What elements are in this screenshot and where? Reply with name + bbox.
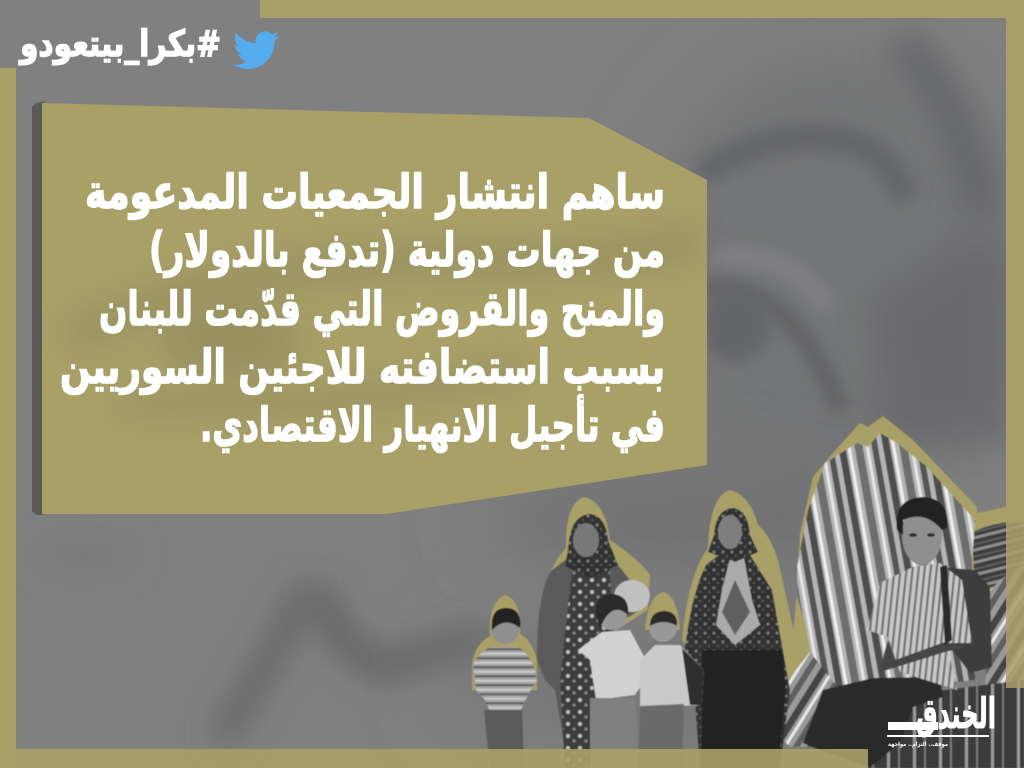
background: nose crease [220, 586, 310, 740]
statement text: ساهم انتشار الجمعيات المدعومة [85, 165, 665, 220]
bag: second bundle at right [972, 522, 1024, 590]
logo: Al-Khandaq [887, 689, 996, 748]
panel: main statement [32, 101, 707, 515]
gold halos behind figures [472, 416, 1024, 690]
statement text: في تأجيل الانهيار الاقتصادي. [200, 394, 665, 453]
bag: base stripes [868, 680, 1024, 768]
background: eye fold light [708, 256, 830, 310]
bag: large striped bundle [797, 433, 975, 690]
panel body [42, 103, 707, 514]
statement text: والمنح والقروض التي قدّمت للبنان [99, 282, 665, 337]
gold frame: bottom strip [0, 749, 868, 768]
background: eye lid dark [700, 288, 840, 410]
gold overlay on right strip [1006, 505, 1024, 688]
logo underline [887, 735, 989, 737]
figure: boy sitting on bag [803, 497, 992, 767]
background: cheek side shadow [870, 240, 1010, 440]
statement text: من جهات دولية (تدفع بالدولار) [149, 223, 665, 278]
gold frame: left strip [0, 68, 16, 768]
logo stroke bar [888, 722, 938, 730]
background: nose wing [320, 590, 490, 668]
figure: woman left [537, 514, 650, 768]
background: brow arc [700, 137, 905, 200]
statement text [60, 165, 665, 453]
gold frame: top strip [260, 0, 1024, 18]
panel side edge [32, 101, 46, 515]
hashtag heading with icon [18, 24, 279, 69]
panel: eye showing through [70, 240, 700, 406]
logo tagline: موقف.. التزام.. مواجهة [888, 741, 948, 748]
figure: child right [638, 611, 704, 768]
figure: child left [473, 608, 537, 768]
statement text: بسبب استضافته للاجئين السوريين [60, 340, 665, 395]
hashtag text: #بكرا_بيتعودو [18, 24, 221, 65]
icon: twitter bird [233, 31, 279, 69]
illustration: refugee family with gold halo [472, 416, 1024, 768]
background: temple shadow [900, 40, 985, 220]
background: right side tone [640, 50, 1024, 510]
bag: lower bundle [780, 652, 900, 747]
background: iris [699, 289, 771, 361]
gold frame: right strip [1006, 0, 1024, 688]
figure: child middle [578, 594, 646, 768]
figure: woman right [682, 508, 790, 768]
background: lower mid shadow [480, 475, 920, 565]
